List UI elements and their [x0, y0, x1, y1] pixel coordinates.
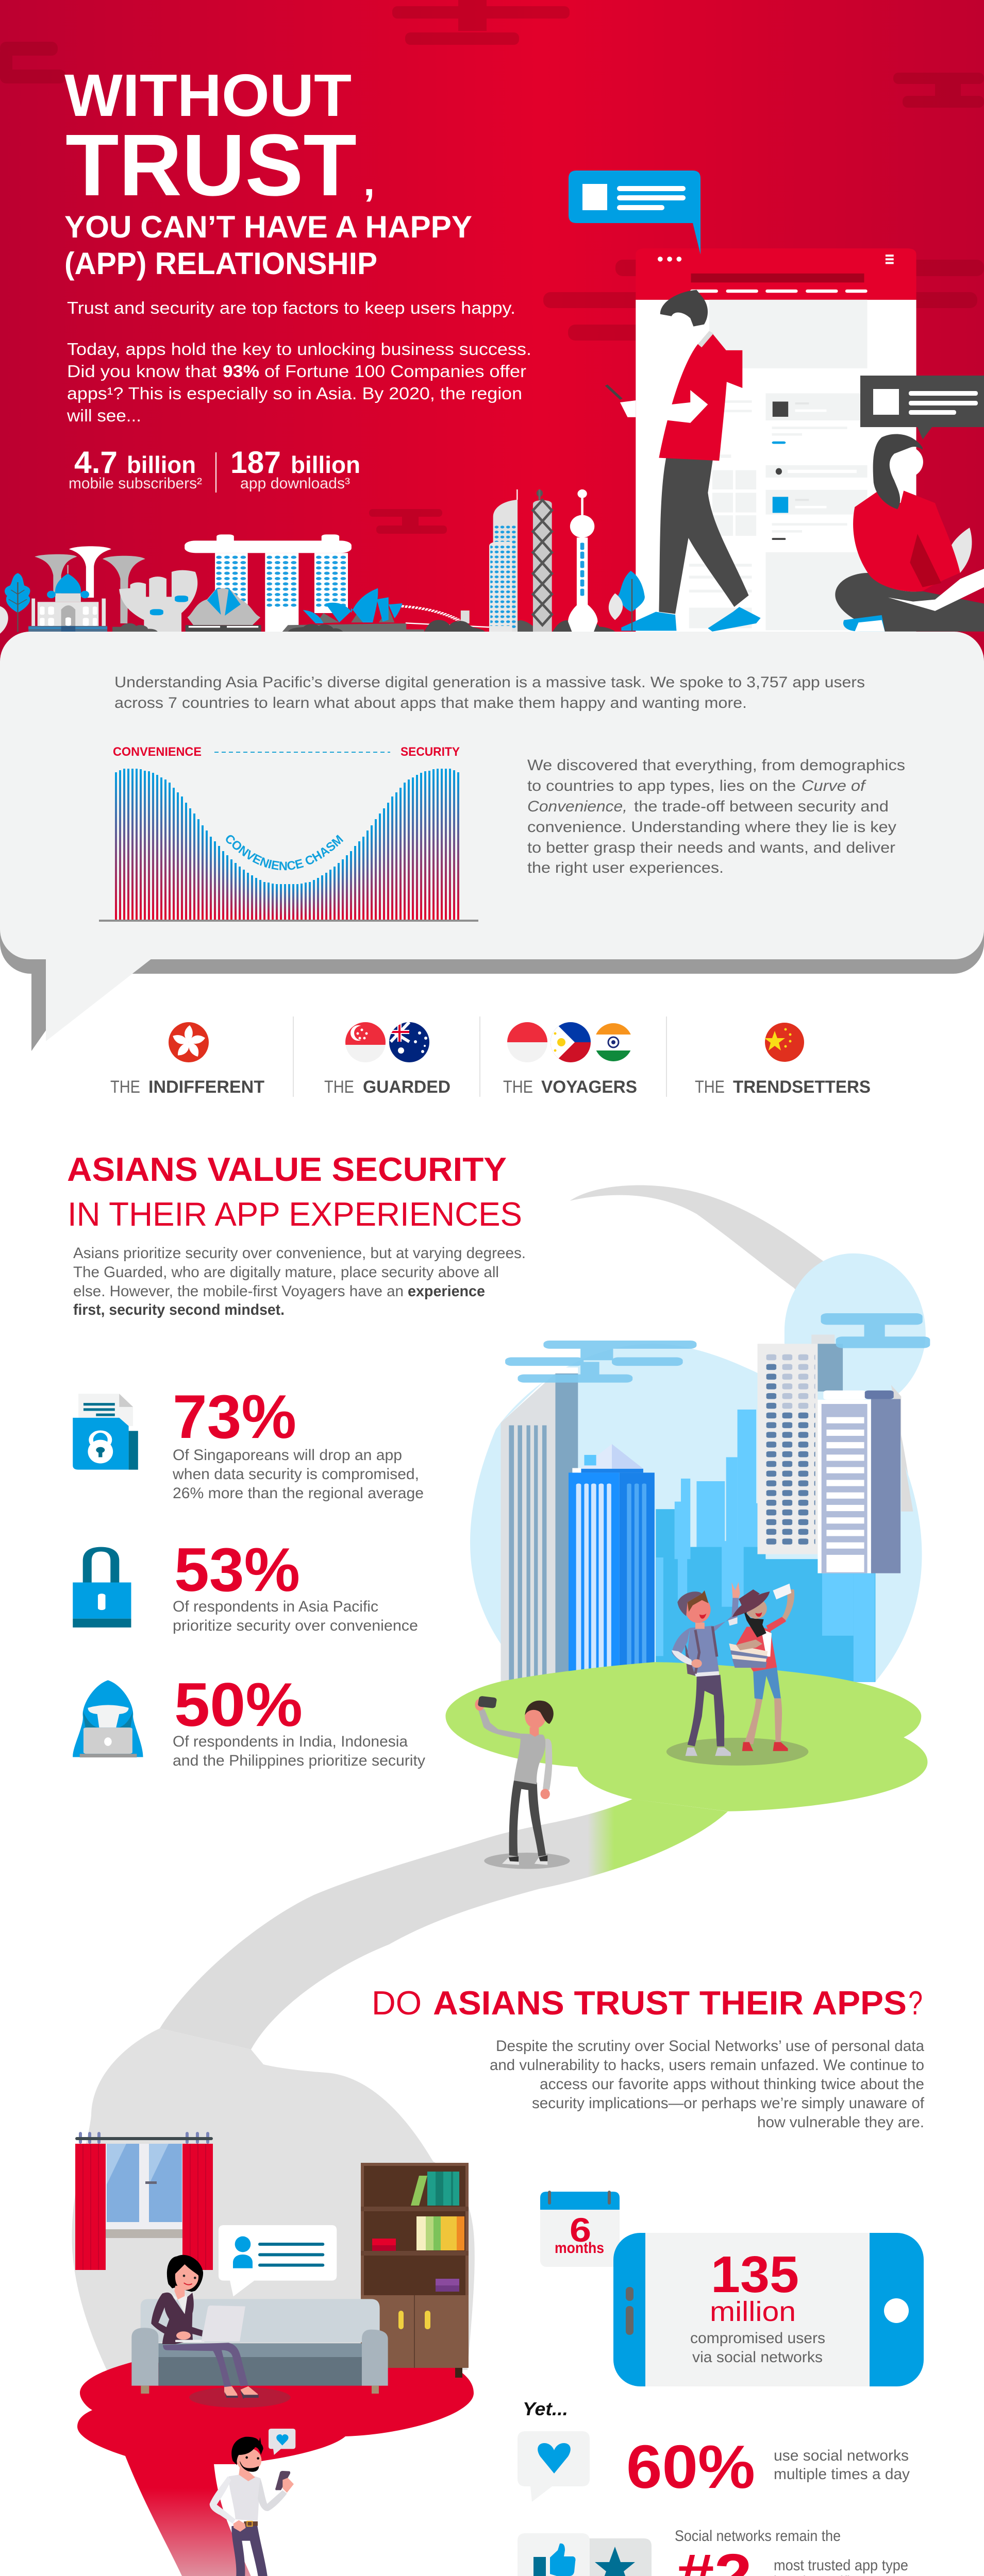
intro text	[114, 674, 865, 711]
heading: do asians trust their apps: DO	[372, 1984, 422, 2022]
road behind city	[570, 1185, 913, 1512]
title: WITHOUT	[64, 62, 352, 129]
trust body text	[490, 2038, 925, 2131]
illustration: standing man with phone	[606, 290, 761, 632]
selfie man	[475, 1696, 570, 1869]
lotus temple	[186, 588, 261, 632]
title: ,	[363, 158, 375, 204]
phone: 135 million compromised users: 135	[711, 2246, 799, 2303]
stat: 50%: and the Philippines prioritize security	[173, 1752, 425, 1769]
illustration: Asian city skyline	[0, 489, 615, 634]
chart: curve of convenience: SECURITY	[401, 745, 460, 759]
speech bubble with profile	[219, 2225, 337, 2296]
trust body text: security implications—or perhaps we’re simply unaware of	[532, 2095, 925, 2112]
text: yet: Yet...	[523, 2398, 568, 2419]
security body text	[73, 1245, 526, 1318]
illustration: window with red curtains	[75, 2132, 213, 2270]
stat: app downloads	[230, 445, 360, 492]
stat: 53%: 53%	[174, 1535, 300, 1604]
calendar: 6 months: months	[555, 2240, 604, 2257]
curve of convenience text: the right user experiences.	[527, 859, 724, 876]
security body text: The Guarded, who are digitally mature, place security above all	[73, 1264, 499, 1281]
winding road, grey section	[160, 1799, 728, 2049]
woman	[151, 2255, 259, 2399]
icon: heart bubble	[518, 2431, 590, 2502]
hero intro text: will see...	[66, 406, 141, 425]
flag: Indonesia	[507, 1022, 547, 1063]
icon: heart speech bubble	[269, 2429, 295, 2455]
clouds	[505, 1313, 930, 1383]
illustration: city scene	[470, 1185, 930, 1683]
illustration: man walking with phone	[204, 2429, 295, 2576]
label: the voyagers: THE	[503, 1077, 533, 1097]
hero intro text: Did you know that	[67, 362, 216, 381]
title	[64, 62, 472, 281]
icon: padlock	[73, 1549, 131, 1628]
security body text: else. However, the mobile-first Voyagers have an	[73, 1283, 404, 1300]
chart: curve of convenience: CONVENIENCE	[113, 745, 202, 759]
stat: 53%: prioritize security over convenience	[173, 1617, 418, 1634]
stat: app downloads: 187	[230, 445, 281, 480]
calendar: 6 months: 6	[570, 2211, 591, 2249]
curve of convenience text: We discovered that everything, from demographics	[527, 757, 905, 774]
curve of convenience text: to countries to app types, lies on the	[527, 777, 796, 794]
icon: blue tree	[5, 573, 30, 632]
security body text: first, security second mindset.	[73, 1301, 285, 1318]
ArtScience museum	[119, 570, 197, 632]
illustration: seated woman with laptop	[609, 434, 984, 632]
phone: 135 million compromised users: via social networks	[692, 2349, 823, 2366]
label: the trendsetters: TRENDSETTERS	[733, 1077, 871, 1097]
phone: 135 million compromised users: compromised users	[690, 2330, 825, 2347]
calendar: 6 months	[540, 2191, 620, 2267]
chart: curve of convenience	[99, 745, 478, 922]
stat: 73%: Of Singaporeans will drop an app	[173, 1447, 402, 1464]
white window tower	[758, 1334, 843, 1554]
Taj Mahal	[28, 565, 107, 632]
stat: 73%	[172, 1382, 424, 1502]
curve of convenience text: Convenience,	[527, 798, 627, 815]
stat: 53%: Of respondents in Asia Pacific	[173, 1598, 378, 1615]
Sydney Opera House and bridge	[282, 588, 489, 632]
icon: thumbs up bubble	[518, 2533, 590, 2576]
illustration: app window	[636, 248, 916, 632]
stat: 60%: use social networks	[774, 2447, 909, 2464]
flag: China	[764, 1023, 804, 1062]
curve of convenience text: the trade-off between security and	[634, 798, 889, 815]
stat: 60%	[626, 2433, 910, 2501]
phone: 135 million compromised users	[613, 2233, 924, 2386]
title: TRUST	[65, 116, 357, 214]
security body text: experience	[408, 1283, 485, 1300]
hero intro text	[66, 298, 531, 425]
curve of convenience text: to better grasp their needs and wants, and deliver	[527, 839, 895, 856]
icon: dark speech bubble	[860, 376, 984, 439]
panel: survey intro speech bubble	[0, 632, 984, 1041]
icon: hooded hacker at laptop	[73, 1680, 143, 1757]
intro text: Understanding Asia Pacific’s diverse digital generation is a massive task. We spoke to 3,757 app users	[114, 674, 865, 691]
Bank of China tower	[533, 489, 552, 632]
label: the guarded	[324, 1077, 451, 1097]
stat: app downloads: app downloads³	[240, 475, 350, 492]
grey room backdrop	[72, 2028, 475, 2370]
label: the guarded: THE	[324, 1077, 354, 1097]
slate tower	[818, 1391, 900, 1573]
stat: 50%	[173, 1670, 425, 1769]
trust body text: access our favorite apps without thinking twice about the	[540, 2076, 924, 2093]
title: YOU CAN’T HAVE A HAPPY	[64, 210, 472, 244]
hero intro text: Today, apps hold the key to unlocking business success.	[67, 340, 531, 359]
Oriental Pearl tower	[568, 489, 597, 632]
stat: app downloads: billion	[291, 451, 360, 478]
trust body text: and vulnerability to hacks, users remain unfazed. We continue to	[490, 2057, 924, 2074]
stat: mobile subscribers: mobile subscribers²	[69, 475, 202, 492]
trust body text: how vulnerable they are.	[757, 2114, 924, 2131]
red rug and fading path	[77, 2362, 841, 2576]
hero intro text: of Fortune 100 Companies offer	[264, 362, 526, 381]
heading: asians value security: ASIANS VALUE SECURITY	[67, 1150, 507, 1188]
panel: speech bubble shadow	[0, 670, 984, 1051]
blue tower	[569, 1444, 655, 1683]
tourist woman	[729, 1584, 794, 1751]
stat: 50%: 50%	[174, 1670, 303, 1739]
hero intro text: 93%	[223, 362, 259, 381]
stat: 60%: 60%	[626, 2433, 755, 2501]
stat: 50%: Of respondents in India, Indonesia	[173, 1733, 408, 1750]
icon: star bubble	[580, 2538, 652, 2576]
stat: 73%: 73%	[173, 1382, 296, 1451]
stat: 53%	[173, 1535, 418, 1634]
stat: #2: most trusted app type	[774, 2557, 908, 2574]
row: audience segments	[110, 1016, 871, 1097]
hero intro text: Trust and security are top factors to keep users happy.	[67, 298, 515, 317]
decorative clouds in hero	[0, 0, 984, 534]
label: the guarded: GUARDED	[363, 1077, 451, 1097]
illustration: bookshelf	[361, 2163, 469, 2378]
flag: Australia	[389, 1022, 429, 1062]
flag: Hong Kong	[169, 1022, 209, 1062]
stat: mobile subscribers: 4.7	[74, 445, 118, 480]
chart: curve of convenience: CONVENIENCE CHASM	[226, 835, 343, 871]
flag: India	[596, 1023, 631, 1061]
hero intro text: apps¹? This is especially so in Asia. By 2020, the region	[67, 384, 522, 403]
Marina Bay Sands	[185, 534, 352, 632]
stat: #2: Social networks remain the	[675, 2528, 841, 2545]
title: (APP) RELATIONSHIP	[64, 246, 377, 281]
label: the trendsetters: THE	[695, 1077, 725, 1097]
tourist man	[672, 1582, 740, 1756]
panel: hero background	[0, 0, 984, 670]
illustration: woman on sofa with laptop	[131, 2225, 388, 2408]
phone: 135 million compromised users: million	[710, 2296, 796, 2327]
heading: asians value security	[67, 1150, 522, 1233]
illustration: tourists taking a selfie	[475, 1582, 808, 1869]
curve of convenience text	[527, 757, 905, 876]
background buildings	[675, 1410, 758, 1561]
label: the indifferent: INDIFFERENT	[148, 1077, 264, 1097]
shrubs	[112, 620, 615, 632]
heading: do asians trust their apps: ?	[908, 1984, 923, 2022]
sofa	[131, 2299, 388, 2394]
stat: 73%: when data security is compromised,	[172, 1466, 419, 1483]
label: the indifferent: THE	[110, 1077, 140, 1097]
heading: do asians trust their apps: ASIANS TRUST THEIR APPS	[433, 1984, 907, 2022]
intro text: across 7 countries to learn what about apps that make them happy and wanting more.	[114, 694, 747, 711]
flag: Philippines	[551, 1022, 591, 1063]
flag: Singapore	[345, 1022, 386, 1065]
stat: 60%: multiple times a day	[774, 2466, 910, 2483]
trust body text: Despite the scrutiny over Social Networks’ use of personal data	[496, 2038, 924, 2055]
stat: mobile subscribers	[69, 445, 202, 492]
pale blue sky blob	[470, 1253, 926, 1682]
security body text: Asians prioritize security over convenience, but at varying degrees.	[73, 1245, 526, 1262]
icon: document folder with padlock	[73, 1394, 138, 1470]
Hong Kong towers	[489, 489, 518, 632]
curve of convenience text: convenience. Understanding where they lie is key	[527, 819, 896, 836]
icon: blue speech bubble	[569, 171, 701, 255]
curve of convenience text: Curve of	[802, 777, 866, 794]
label: the voyagers: VOYAGERS	[541, 1077, 637, 1097]
heading: asians value security: IN THEIR APP EXPERIENCES	[68, 1195, 522, 1233]
grey stripe tower	[501, 1367, 578, 1682]
gardens by the bay	[35, 546, 145, 623]
grass hill	[445, 1662, 927, 1811]
stat: #2	[675, 2528, 908, 2576]
stat: 73%: 26% more than the regional average	[173, 1485, 424, 1502]
stat: mobile subscribers: billion	[127, 451, 196, 478]
